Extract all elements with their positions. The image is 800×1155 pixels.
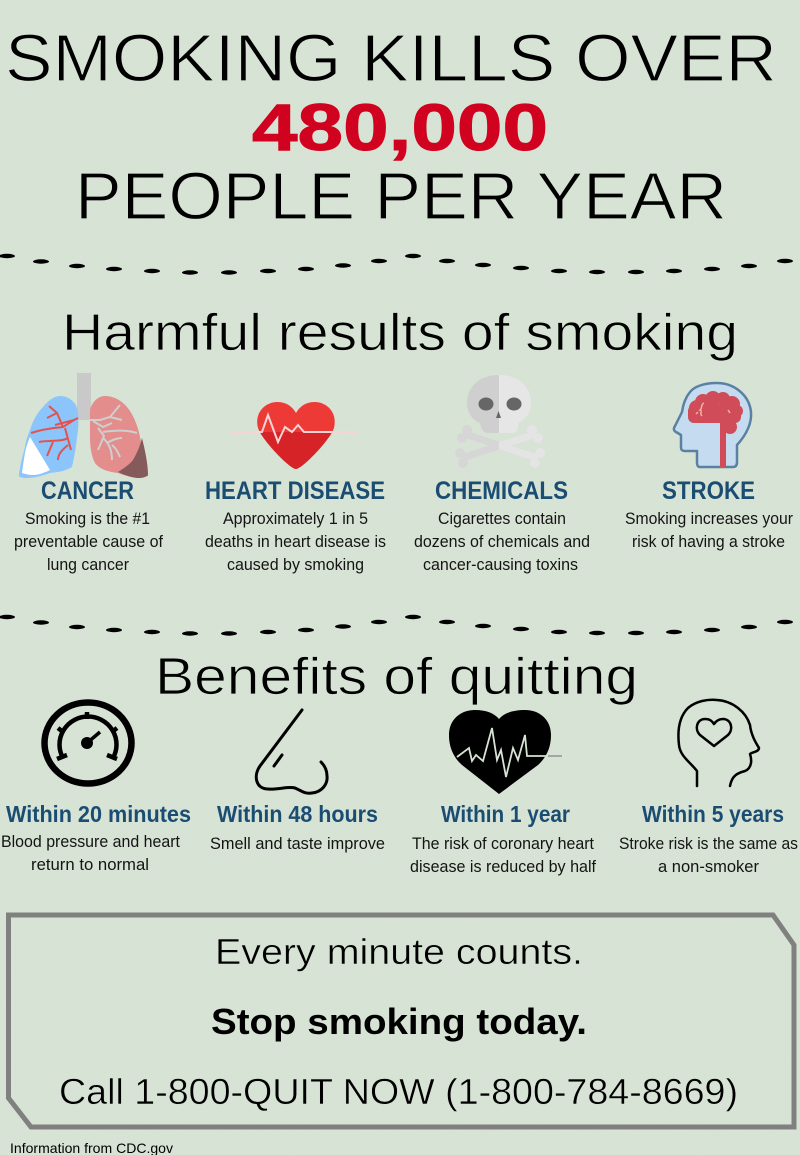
panel: chemicals: dozens of chemicals and [414, 533, 590, 551]
heading: harmful results: Harmful results of smoking [62, 304, 738, 362]
title: PEOPLE PER YEAR [75, 159, 727, 234]
panel: cancer: Smoking is the #1 [25, 510, 150, 528]
panel: within 1 year: disease is reduced by half [410, 858, 596, 876]
callout: call to action: Stop smoking today. [211, 1001, 587, 1042]
title [5, 21, 777, 234]
callout: call to action: Every minute counts. [215, 931, 583, 972]
panel: within 20 minutes: Blood pressure and heart [1, 833, 180, 851]
panel: within 1 year: Within 1 year [441, 801, 570, 827]
panel: cancer: CANCER [41, 477, 134, 505]
panel: chemicals [414, 375, 590, 574]
icon: head with brain [674, 383, 751, 467]
panel: cancer: preventable cause of [14, 533, 163, 551]
panel: stroke: STROKE [662, 477, 755, 505]
icon: skull and crossbones [455, 375, 545, 468]
icon: head with heart [678, 700, 759, 786]
heading: benefits of quitting: Benefits of quitting [155, 648, 638, 706]
panel: cancer [14, 373, 163, 574]
panel: within 20 minutes: return to normal [31, 856, 149, 874]
panel: heart disease: caused by smoking [227, 556, 364, 574]
icon: heart with pulse [229, 402, 357, 469]
panel: stroke [625, 383, 793, 551]
panel: within 5 years: a non-smoker [658, 858, 759, 876]
panel: heart disease: Approximately 1 in 5 [223, 510, 368, 528]
panel: within 20 minutes: Within 20 minutes [6, 801, 191, 827]
title: 480,000 [252, 90, 548, 164]
panel: within 48 hours: Within 48 hours [217, 801, 378, 827]
panel: heart disease: deaths in heart disease is [205, 533, 386, 551]
panel: within 20 minutes [1, 702, 191, 874]
panel: stroke: risk of having a stroke [632, 533, 785, 551]
icon: nose [256, 710, 327, 793]
panel: cancer: lung cancer [47, 556, 129, 574]
callout: call to action: Call 1-800-QUIT NOW (1-800-784-8669) [59, 1071, 738, 1112]
callout: call to action [8, 915, 794, 1127]
panel: within 5 years: Within 5 years [642, 801, 784, 827]
panel: chemicals: Cigarettes contain [438, 510, 566, 528]
panel: heart disease: HEART DISEASE [205, 477, 385, 505]
title: SMOKING KILLS OVER [5, 21, 777, 96]
icon: lungs [19, 373, 148, 478]
panel: chemicals: cancer-causing toxins [423, 556, 578, 574]
panel: heart disease [205, 402, 386, 574]
icon: gauge [44, 702, 132, 784]
icon: black heart with pulse [449, 710, 562, 794]
panel: within 48 hours: Smell and taste improve [210, 835, 385, 853]
panel: within 48 hours [210, 710, 385, 853]
panel: within 5 years [619, 700, 798, 876]
panel: within 1 year: The risk of coronary heart [412, 835, 594, 853]
panel: within 1 year [410, 710, 596, 876]
panel: chemicals: CHEMICALS [435, 477, 568, 505]
panel: stroke: Smoking increases your [625, 510, 793, 528]
